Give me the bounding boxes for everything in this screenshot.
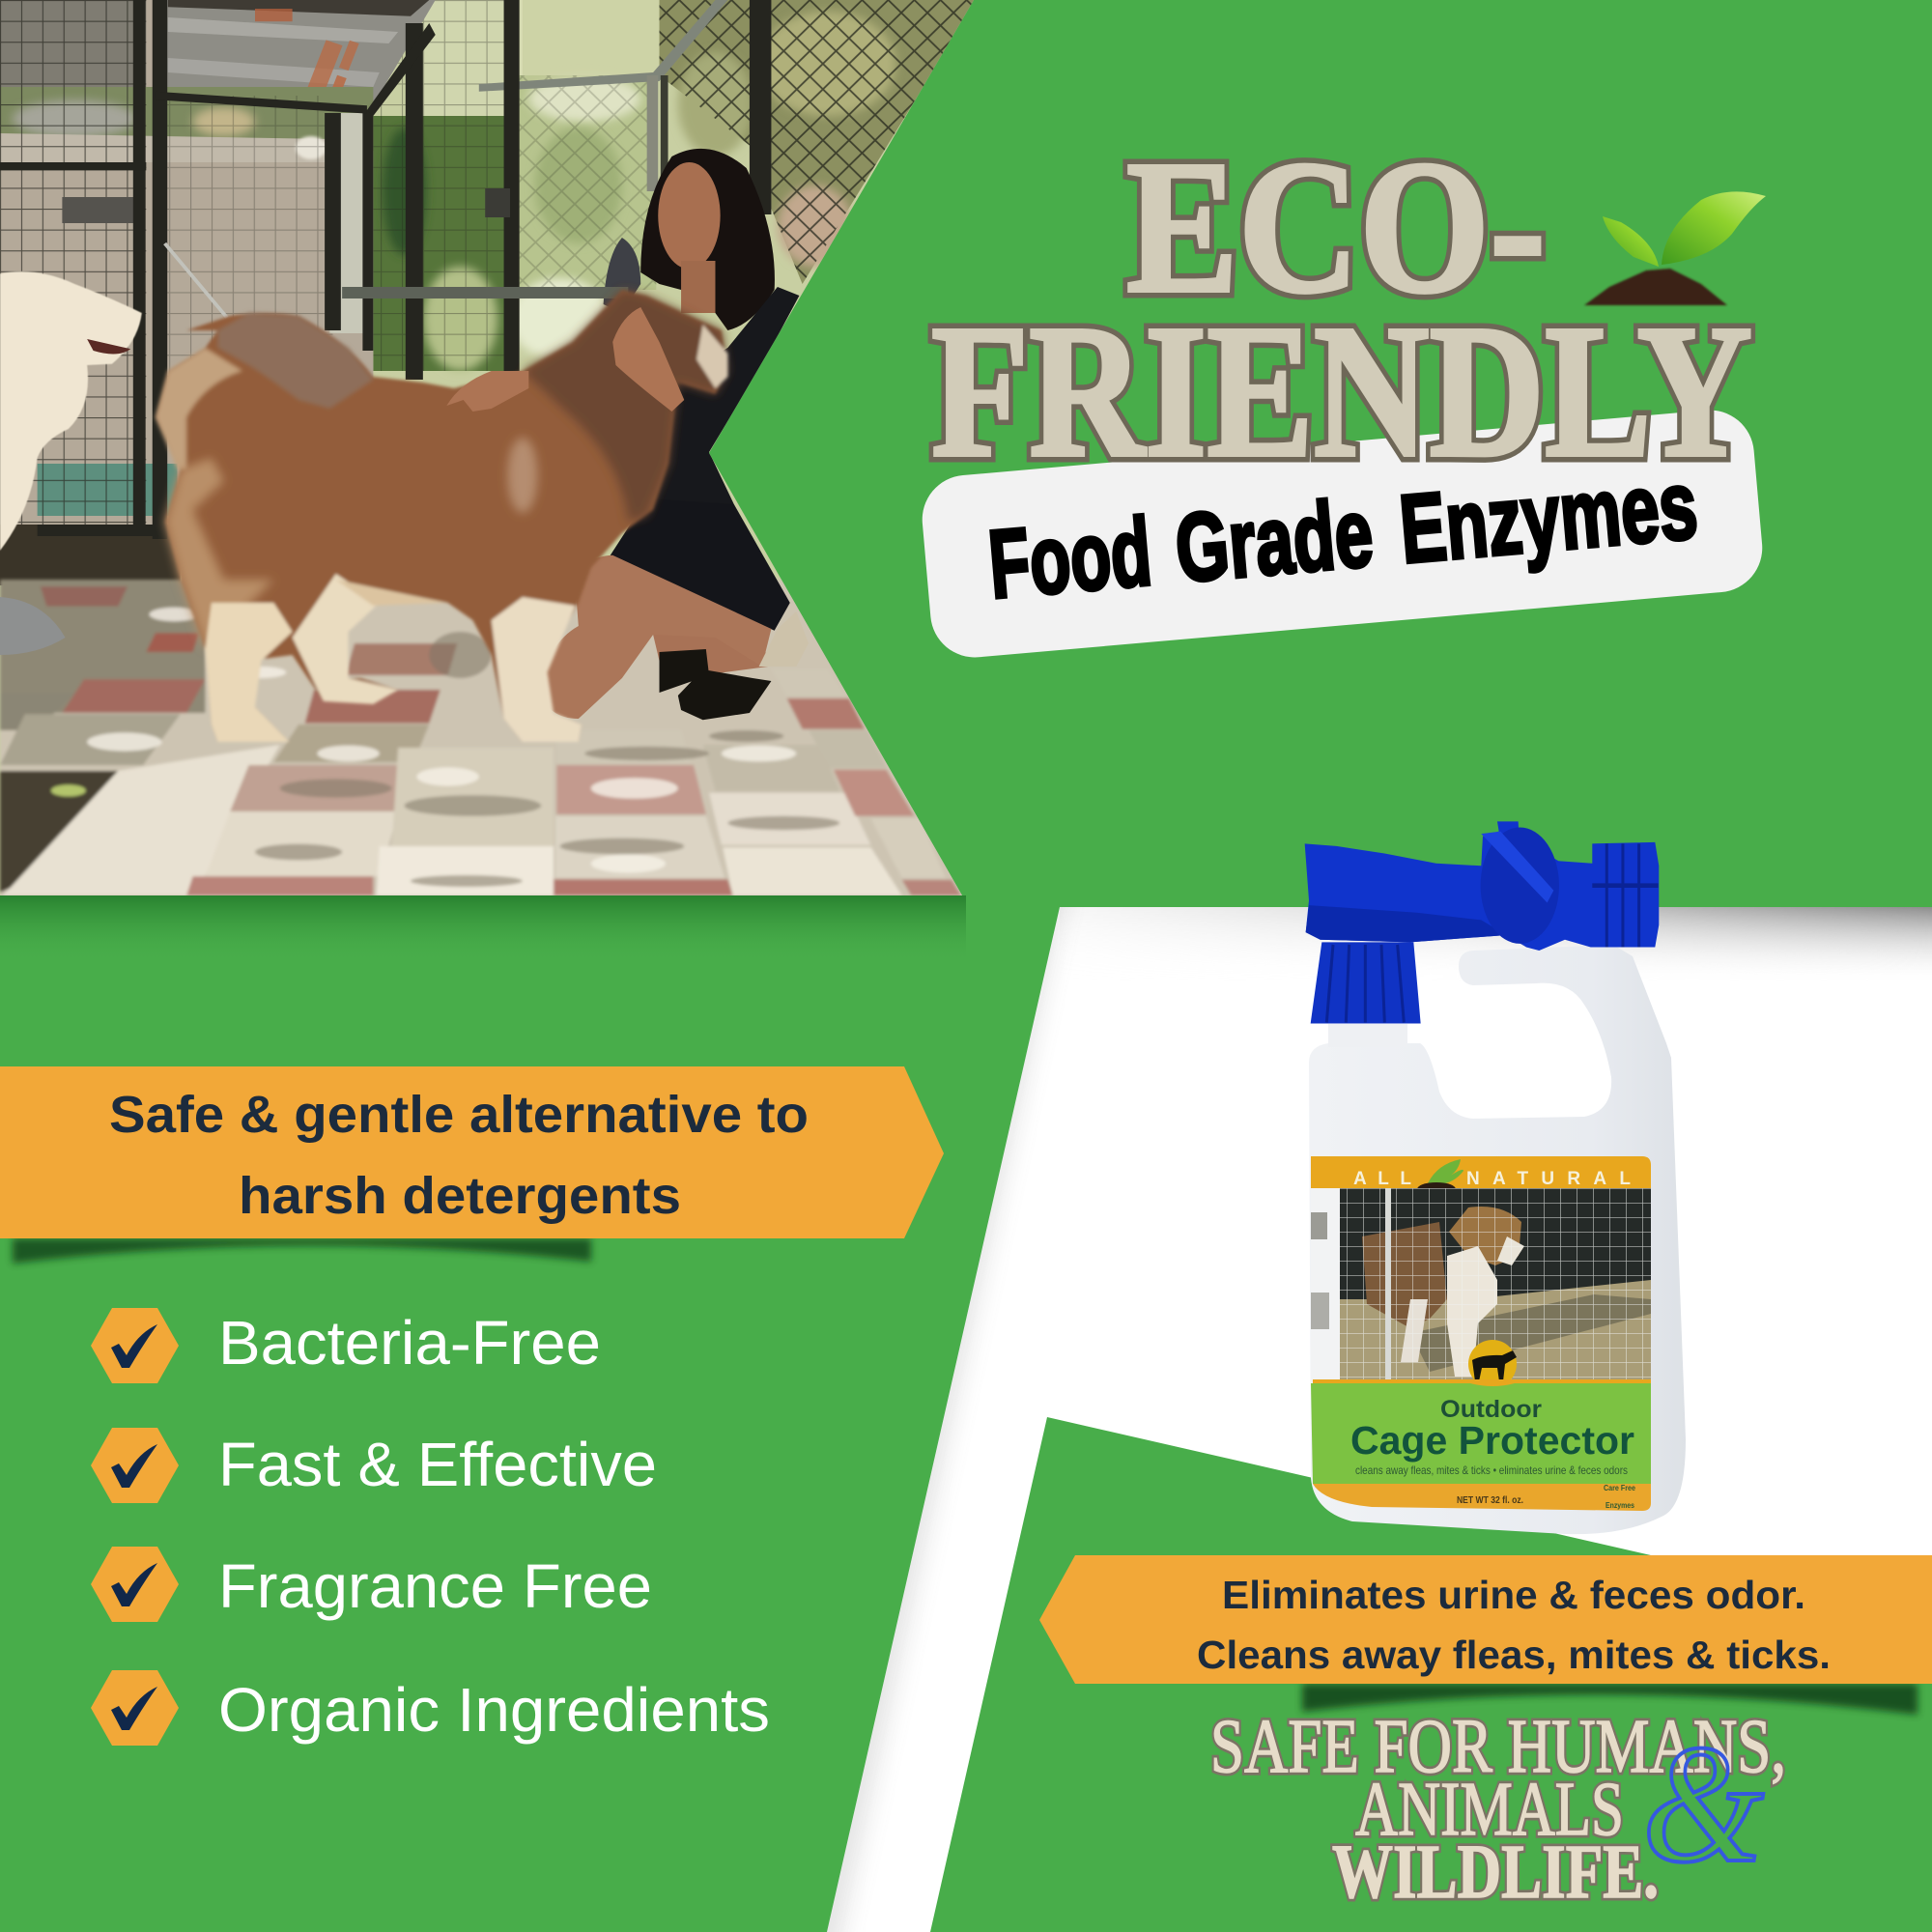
text: safe for humans, animals & wildlife: SAFE FOR HUMANS, <box>1210 1705 1786 1789</box>
sprayer head <box>1305 821 1659 1024</box>
text: safe for humans, animals & wildlife <box>1210 1705 1786 1915</box>
text: safe for humans, animals & wildlife: WILDLIFE. <box>1332 1831 1659 1915</box>
cage posts <box>0 0 771 539</box>
ampersand: & <box>1642 1710 1764 1897</box>
brown dog <box>156 290 727 742</box>
banner: eliminates odor <box>1039 1555 1932 1684</box>
title: ECO-FRIENDLY: FRIENDLY <box>931 285 1752 497</box>
banner: safe and gentle: Safe & gentle alternative to <box>109 1086 809 1144</box>
bottle body <box>1309 945 1686 1534</box>
woman hands <box>446 307 684 412</box>
dog badge <box>1468 1340 1517 1388</box>
label: Care Free <box>1604 1484 1635 1492</box>
label: cleans away fleas, mites & ticks • eliminates urine & feces odors <box>1355 1463 1628 1477</box>
checklist <box>91 1308 770 1746</box>
label: ALL <box>1353 1169 1411 1189</box>
item: Bacteria-Free <box>91 1308 601 1383</box>
text: safe for humans, animals & wildlife: WILDLIFE. <box>1332 1831 1659 1915</box>
white pill: Food Grade Enzymes <box>919 407 1766 661</box>
item: Fast & Effective: Fast & Effective <box>218 1430 657 1499</box>
label: Outdoor <box>1440 1396 1542 1423</box>
panel: white diagonal area <box>808 850 1932 1932</box>
pill text: Food <box>984 497 1155 619</box>
label green band <box>1311 1383 1651 1484</box>
label: Cage Protector <box>1350 1418 1634 1463</box>
ground <box>0 580 977 904</box>
banner shadow: right <box>1302 1684 1918 1715</box>
icon: seedling <box>1584 191 1766 305</box>
banner shadow: left <box>13 1238 591 1264</box>
label photo <box>1340 1188 1651 1379</box>
label: NET WT 32 fl. oz. <box>1457 1495 1523 1506</box>
foliage background <box>373 0 977 371</box>
steel bowl <box>0 597 66 655</box>
product bottle <box>1305 821 1686 1534</box>
photo: woman with dogs in kennel <box>0 0 977 904</box>
pill text: Grade <box>1172 478 1377 603</box>
banner: eliminates odor: Cleans away fleas, mites & ticks. <box>1197 1633 1831 1677</box>
pill text: Enzymes <box>1396 451 1701 583</box>
text: safe for humans, animals & wildlife: ANIMALS <box>1355 1768 1624 1852</box>
label: Enzymes <box>1605 1501 1634 1510</box>
shadow under photo <box>0 895 966 963</box>
title: ECO-FRIENDLY: ECO- <box>1126 121 1546 332</box>
cage background <box>0 0 436 585</box>
item: Bacteria-Free: Bacteria-Free <box>218 1308 601 1378</box>
banner: eliminates odor: Eliminates urine & feces odor. <box>1222 1573 1805 1617</box>
woman <box>540 149 809 720</box>
banner: safe and gentle: harsh detergents <box>239 1167 681 1225</box>
title: ECO-FRIENDLY: FRIENDLY <box>931 285 1752 497</box>
banner: safe and gentle <box>0 1066 944 1238</box>
item: Fragrance Free: Fragrance Free <box>218 1551 652 1621</box>
title: ECO-FRIENDLY: ECO- <box>1126 121 1546 332</box>
label: NATURAL <box>1466 1169 1631 1189</box>
pill text <box>984 451 1701 619</box>
item: Organic Ingredients: Organic Ingredients <box>218 1675 770 1745</box>
white dog <box>0 271 142 551</box>
text: safe for humans, animals & wildlife: SAFE FOR HUMANS, <box>1210 1705 1786 1789</box>
label <box>1311 1156 1651 1511</box>
text: safe for humans, animals & wildlife: ANIMALS <box>1355 1768 1624 1852</box>
title: ECO-FRIENDLY <box>931 121 1752 497</box>
